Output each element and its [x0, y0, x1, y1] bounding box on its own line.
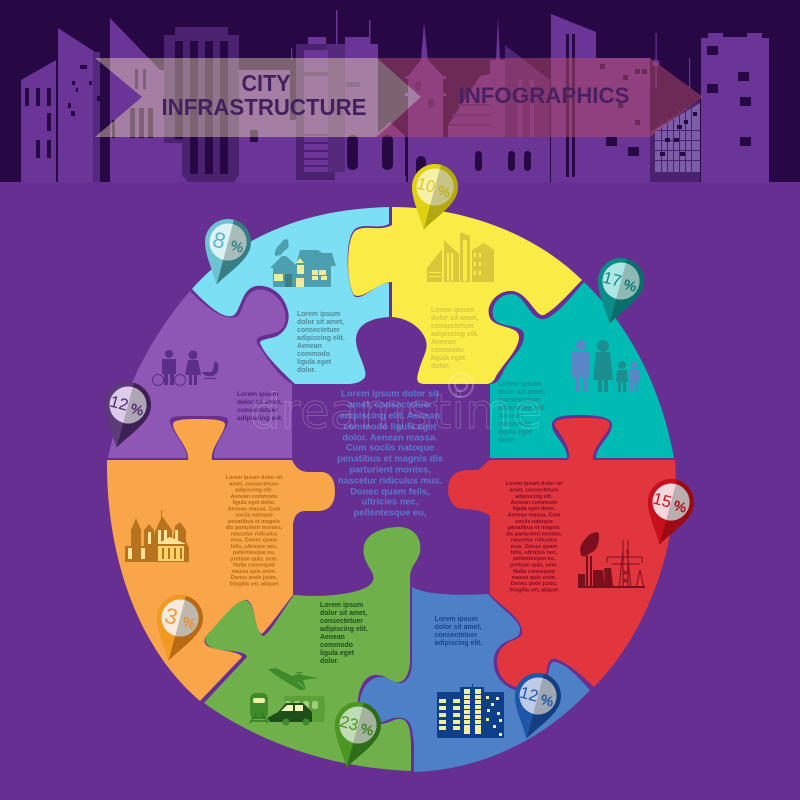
- building: tall slab: [551, 14, 650, 182]
- text: orange block: pretium quis, sem.: [230, 556, 278, 562]
- building: dark office tower: [164, 27, 239, 182]
- building: low block with windows: [160, 70, 290, 182]
- arrow: first banner: [95, 58, 421, 137]
- text: green block: Lorem ipsum: [320, 602, 363, 609]
- text: orange block: Nulla consequat: [233, 562, 275, 568]
- text: yellow block: dolor.: [431, 363, 450, 370]
- text: blue block: Lorem ipsum: [434, 616, 478, 623]
- pin: 17%: [587, 253, 649, 329]
- text: cyan block: commodo: [297, 351, 330, 358]
- pin: 15%: [637, 474, 699, 550]
- heading: CITY: CITY: [242, 70, 290, 96]
- icon: houses: [270, 239, 336, 287]
- text: central block: Cum sociis natoque: [346, 442, 434, 452]
- text: yellow block: dolor sit amet,: [431, 315, 478, 322]
- arrow: second banner: [375, 58, 703, 137]
- text: yellow block: Aenean: [431, 339, 456, 346]
- text: orange block: penatibus et magnis: [228, 519, 280, 525]
- icon: cathedral: [125, 510, 189, 562]
- text: orange block: Aenean commodo: [231, 494, 278, 500]
- text: yellow block: ligula eget: [431, 355, 466, 362]
- text: orange block: fringilla vel, aliquet: [230, 581, 279, 587]
- text: cyan block: adipiscing elit.: [297, 335, 345, 342]
- icon: night building: [437, 684, 504, 738]
- text: orange block: amet, consectetuer: [229, 481, 279, 487]
- text: orange block: [226, 475, 283, 587]
- icon: cyclist and mother with pram: [152, 350, 218, 386]
- text: cyan block: Lorem ipsum: [297, 311, 340, 318]
- text: central block: [337, 388, 443, 518]
- pin: 17%: %: [622, 277, 638, 296]
- icon: family: [572, 340, 639, 392]
- puzzle piece: orange: [107, 419, 335, 701]
- text: green block: dolor.: [320, 658, 339, 665]
- pin: 23%: 23: [338, 713, 360, 735]
- pin: 15%: 15: [651, 490, 673, 512]
- text: violet block: Lorem ipsum: [237, 391, 279, 398]
- text: cyan block: dolor.: [297, 367, 316, 374]
- puzzle piece: green: [204, 527, 420, 771]
- text: red block: mus. Donec quam: [511, 544, 557, 550]
- text: yellow block: [431, 307, 479, 370]
- text: green block: dolor sit amet,: [320, 610, 367, 617]
- text: green block: [320, 602, 368, 665]
- pin: 12% violet: 12: [108, 393, 130, 415]
- text: red block: Nulla consequat: [513, 569, 555, 575]
- text: red block: Aenean massa. Cum: [508, 512, 561, 518]
- puzzle piece: red: [448, 418, 676, 689]
- pin: 12% blue: %: [539, 692, 555, 711]
- text: red block: Lorem ipsum dolor sit: [506, 481, 563, 487]
- text: orange block: Donec pede justo,: [231, 575, 278, 581]
- text: orange block: Aenean massa. Cum: [228, 506, 281, 512]
- pin: 12% violet: %: [129, 401, 145, 420]
- text: violet block: adipiscing elit.: [237, 415, 283, 422]
- text: central block: ultricies nec,: [362, 496, 418, 506]
- text: orange block: ligula eget dolor.: [233, 500, 276, 506]
- text: central block: commodo ligula eget: [344, 422, 436, 432]
- text: red block: dis parturient montes,: [506, 531, 563, 537]
- text: violet block: consectetuer: [237, 407, 278, 414]
- text: blue block: adipiscing elit.: [434, 640, 482, 647]
- pin: 12% violet: [94, 377, 156, 453]
- text: red block: sociis natoque: [515, 519, 553, 525]
- text: orange block: massa quis enim.: [232, 569, 277, 575]
- text: blue block: consectetuer: [434, 632, 478, 639]
- text: red block: pretium quis, sem.: [510, 562, 558, 568]
- text: cyan block: Aenean: [297, 343, 322, 350]
- text: red block: [506, 481, 563, 594]
- text: orange block: felis, ultricies nec,: [231, 544, 278, 550]
- text: orange block: adipiscing elit.: [235, 488, 273, 494]
- text: orange block: mus. Donec quam: [231, 538, 277, 544]
- panel: city skyline header: [0, 0, 800, 182]
- heading: INFRASTRUCTURE: INFRASTRUCTURE: [162, 94, 366, 120]
- text: red block: fringilla vel, aliquet: [510, 588, 559, 594]
- pin: 10%: 10: [415, 175, 437, 197]
- text: red block: amet, consectetuer: [509, 488, 559, 494]
- puzzle piece: violet: [108, 290, 292, 458]
- text: yellow block: Lorem ipsum: [431, 307, 474, 314]
- text: teal block: adipiscing elit.: [498, 405, 546, 412]
- pin: 10%: [401, 159, 463, 235]
- text: red block: Donec pede justo,: [511, 581, 558, 587]
- pin: 23%: [324, 697, 386, 773]
- text: blue block: dolor sit amet,: [434, 624, 482, 631]
- text: orange block: dis parturient montes,: [226, 525, 283, 531]
- text: red block: felis, ultricies nec,: [511, 550, 558, 556]
- puzzle piece: yellow: [348, 207, 582, 384]
- building: left block: [21, 60, 56, 182]
- text: teal block: ligula eget: [498, 429, 533, 436]
- text: cyan block: consectetuer: [297, 327, 340, 334]
- text: central block: amet, consectetuer: [348, 400, 433, 410]
- text: red block: massa quis enim.: [512, 575, 557, 581]
- building: grid tower: [650, 33, 700, 182]
- text: central block: pellentesque eu,: [354, 508, 426, 518]
- text: teal block: [498, 381, 546, 444]
- puzzle piece: blue: [360, 587, 590, 772]
- text: cyan block: dolor sit amet,: [297, 319, 344, 326]
- text: central block: Donec quam felis,: [350, 486, 430, 496]
- text: violet block: [237, 391, 283, 422]
- text: teal block: dolor.: [498, 437, 517, 444]
- building: twin tower: [290, 10, 408, 182]
- icon: plane, train, car, bus: [250, 668, 325, 726]
- pin: 8%: [194, 214, 256, 290]
- heading: INFOGRAPHICS: INFOGRAPHICS: [458, 83, 630, 108]
- text: red block: penatibus et magnis: [508, 525, 560, 531]
- text: teal block: commodo: [498, 421, 531, 428]
- text: central block: dolor. Aenean massa.: [342, 432, 438, 442]
- text: red block: nascetur ridiculus: [511, 538, 557, 544]
- text: green block: consectetuer: [320, 618, 363, 625]
- text: teal block: dolor sit amet,: [498, 389, 545, 396]
- puzzle piece: cyan: [192, 207, 389, 384]
- text: teal block: Aenean: [498, 413, 523, 420]
- text: orange block: Lorem ipsum dolor sit: [226, 475, 283, 481]
- text: teal block: consectetuer: [498, 397, 541, 404]
- pin: 3%: 3: [162, 602, 180, 630]
- text: red block: pellentesque eu,: [513, 556, 556, 562]
- building: castle tower: [701, 33, 769, 182]
- pin: 8%: 8: [210, 226, 228, 254]
- text: green block: Aenean: [320, 634, 345, 641]
- watermark: dreamstime: [250, 384, 542, 440]
- icon: skyscrapers: [427, 232, 494, 282]
- pin: 23%: %: [359, 721, 375, 740]
- pin: 8%: %: [229, 238, 245, 257]
- text: central block: parturient montes,: [349, 464, 431, 474]
- text: green block: adipiscing elit.: [320, 626, 368, 633]
- text: red block: Aenean commodo: [511, 500, 558, 506]
- text: green block: commodo: [320, 642, 353, 649]
- text: yellow block: adipiscing elit.: [431, 331, 479, 338]
- pin: 15%: %: [672, 498, 688, 517]
- building: slanted tower: [58, 28, 108, 182]
- pin: 3%: %: [181, 614, 197, 633]
- text: central block: nascetur ridiculus mus.: [338, 476, 442, 486]
- text: orange block: pellentesque eu,: [233, 550, 276, 556]
- text: central block: adipiscing elit. Aenean: [340, 410, 441, 420]
- text: yellow block: commodo: [431, 347, 464, 354]
- pin: 17%: 17: [601, 269, 623, 291]
- text: red block: ligula eget dolor.: [513, 506, 556, 512]
- text: cyan block: ligula eget: [297, 359, 332, 366]
- text: teal block: Lorem ipsum: [498, 381, 541, 388]
- text: blue block: [434, 616, 482, 647]
- text: yellow block: consectetuer: [431, 323, 474, 330]
- text: red block: adipiscing elit.: [515, 494, 553, 500]
- text: central block: Lorem ipsum dolor sit: [341, 388, 439, 398]
- pin: 3%: [146, 590, 208, 666]
- text: orange block: nascetur ridiculus: [231, 531, 277, 537]
- text: orange block: sociis natoque: [235, 512, 273, 518]
- pin: 12% blue: 12: [518, 684, 540, 706]
- text: cyan block: [297, 311, 345, 374]
- text: green block: ligula eget: [320, 650, 355, 657]
- building: triangle roof church: [110, 18, 170, 182]
- text: central block: penatibus et magnis dis: [337, 454, 443, 464]
- text: violet block: dolor sit amet,: [237, 399, 282, 406]
- pin: 10%: %: [436, 183, 452, 202]
- puzzle piece: teal: [490, 282, 674, 458]
- building: steeple church: [405, 17, 551, 182]
- pin: 12% blue: [504, 668, 566, 744]
- icon: power plant: [578, 532, 645, 588]
